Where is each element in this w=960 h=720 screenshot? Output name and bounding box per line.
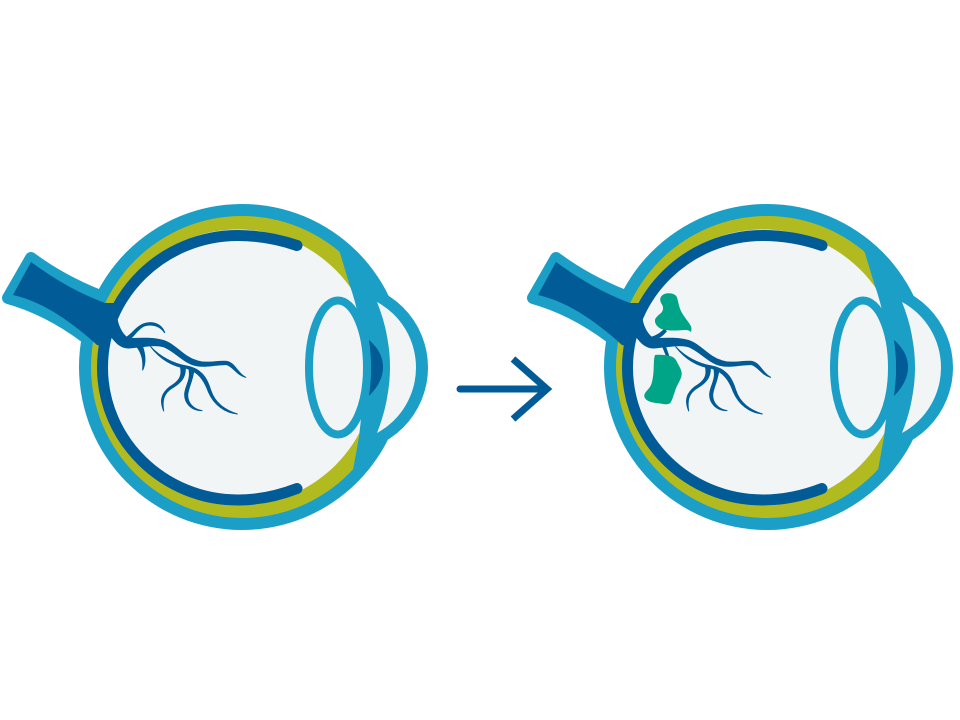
optic nerve sheath [533, 258, 625, 340]
anterior chamber [902, 302, 941, 433]
sclera front band [330, 236, 392, 495]
lens [834, 300, 892, 434]
retina arc [628, 236, 822, 500]
eye: retina with lesions [533, 204, 953, 530]
optic nerve sheath [8, 258, 100, 340]
sclera front band [855, 236, 917, 495]
blood vessels [635, 320, 771, 414]
lesion: lower [644, 355, 682, 404]
vitreous interior [100, 230, 376, 506]
blood vessels [110, 320, 246, 414]
iris [894, 340, 908, 396]
cornea [783, 282, 953, 452]
choroid green ring [616, 216, 918, 518]
optic nerve [13, 262, 117, 347]
arrow [460, 359, 547, 419]
vitreous interior [625, 230, 901, 506]
sclera outer ring [79, 204, 405, 530]
sclera outer ring [604, 204, 930, 530]
optic nerve [538, 262, 642, 347]
eye: healthy retina [8, 204, 428, 530]
retina arc [102, 236, 297, 500]
cornea [258, 282, 428, 452]
iris [369, 340, 383, 396]
choroid green ring [91, 216, 393, 518]
lesion: upper [655, 293, 691, 332]
anterior chamber [377, 302, 416, 433]
lens [309, 300, 367, 434]
